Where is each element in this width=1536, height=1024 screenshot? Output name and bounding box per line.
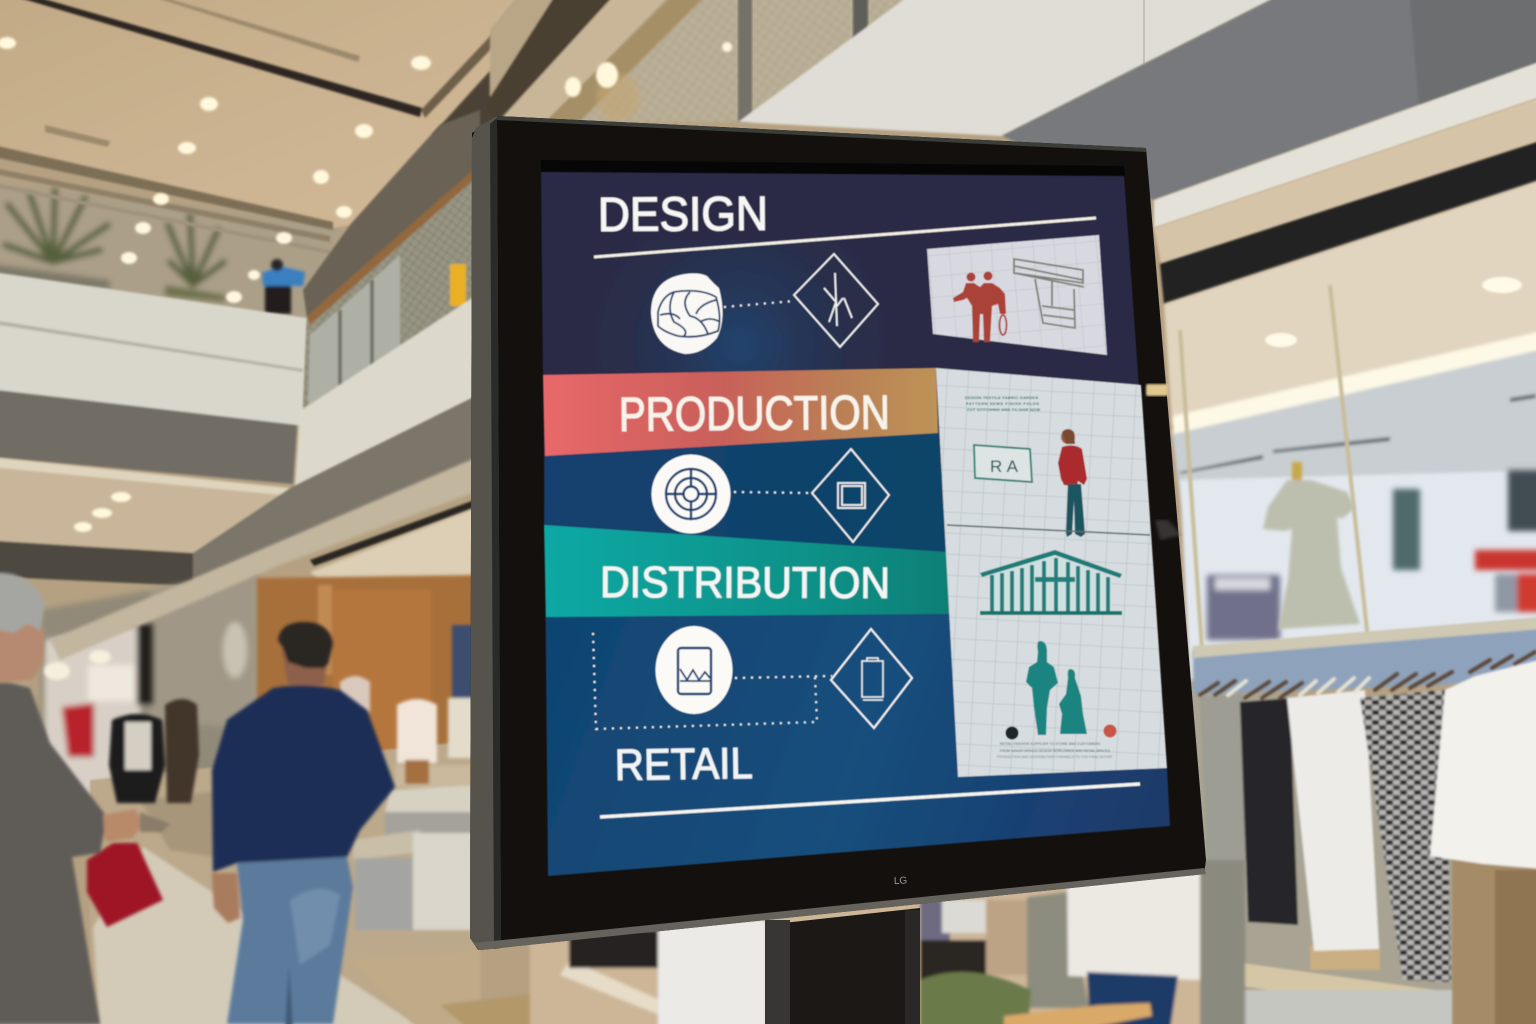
small caption: CUT STITCHING AND TO SHIP NOW (967, 407, 1040, 412)
lower ceiling (0, 394, 480, 586)
connector: production dots (734, 492, 812, 493)
dark beam right (1160, 136, 1536, 304)
left balcony fascia (0, 270, 307, 484)
figure: line structure (1014, 259, 1084, 328)
figures: teal silhouettes (1026, 641, 1087, 735)
glass and mesh railing (580, 0, 935, 122)
ceiling beams and vents (0, 0, 515, 254)
connector: retail dotted route (593, 633, 832, 729)
icon: design circle (651, 273, 723, 354)
man in navy sweater walking (212, 622, 395, 1024)
heading: DISTRIBUTION: DISTRIBUTION (600, 558, 890, 608)
ceiling (0, 0, 600, 228)
white display tables (340, 625, 480, 930)
display screen (541, 172, 1170, 876)
screen base navy (541, 172, 1170, 876)
sweater (212, 685, 395, 872)
wood store wall (257, 575, 480, 800)
figure: person in red (1058, 429, 1087, 537)
person on balcony (262, 259, 305, 314)
store hallway (40, 570, 260, 800)
production band (543, 368, 938, 456)
sign: RA: R A (990, 457, 1019, 476)
man in gray coat with red bag (0, 573, 170, 1024)
light beam diagonal (50, 456, 480, 660)
mannequin dress (1263, 462, 1360, 629)
heading: PRODUCTION: PRODUCTION (619, 387, 890, 442)
right side railing behind the monitor edge (295, 110, 480, 488)
building (980, 550, 1122, 615)
heading: DESIGN: DESIGN (598, 188, 768, 242)
monitor frame (470, 116, 1206, 950)
background under sign (530, 860, 1245, 1024)
gray coat (0, 683, 107, 1024)
icon: production target circle (652, 454, 730, 534)
hangers (1200, 652, 1535, 698)
panel: design sketch (927, 235, 1107, 355)
ground line (947, 525, 1150, 535)
clothes rail (1193, 616, 1536, 658)
reflections on bezel (1146, 384, 1182, 540)
connector: design dots (724, 301, 794, 307)
footnote text: FROM MAKER BRINGS DESIGN WORLDWIDE AND RETAIL SPACES (1000, 749, 1111, 753)
hand (103, 809, 143, 842)
jeans (227, 857, 353, 1024)
hair (278, 622, 333, 668)
icon: retail diamond (831, 629, 912, 728)
icon: production diamond (812, 449, 889, 542)
upper floor interior left (0, 180, 340, 330)
divider: bottom rule (600, 784, 1140, 817)
floor (90, 740, 480, 1024)
footnote text (997, 742, 1112, 759)
divider: design rule (594, 218, 1096, 257)
skin: face and hand (280, 640, 330, 685)
footnote text: PRODUCTION AND DISTRIBUTION CHANNELS TO THE FINAL BUYER (997, 755, 1112, 759)
gray band (0, 388, 297, 484)
brand logo: LG (894, 876, 908, 887)
footnote text: RETAIL FASHION SUPPLIER TO STORE AND CUSTOMERS (1000, 742, 1101, 746)
head (0, 625, 45, 683)
sign: RA (974, 445, 1032, 482)
distant shoppers (109, 699, 199, 803)
figure: red people (953, 272, 1006, 342)
beige soffit (1154, 92, 1536, 264)
store window (1164, 175, 1536, 680)
icon: retail circle (656, 626, 732, 714)
small caption (965, 395, 1040, 412)
clothes rack (1190, 652, 1536, 1024)
window ceiling lights (1265, 277, 1522, 347)
red bag (87, 843, 163, 927)
monitor stand (765, 908, 920, 1024)
distribution band (544, 525, 950, 617)
heading: RETAIL: RETAIL (614, 739, 753, 790)
blue band below rail (1193, 618, 1536, 695)
blue band after production (544, 433, 948, 552)
small logos (1006, 724, 1116, 740)
white balustrade upper right (738, 0, 1310, 136)
panel: illustrated grid (936, 368, 1167, 777)
icon: design diamond (794, 254, 878, 347)
white strip (1154, 56, 1536, 228)
small caption: PATTERN SEWS FINISH FOLDS (966, 401, 1039, 406)
hallway lights (44, 650, 111, 680)
stripes of the dark structure, top middle (430, 0, 722, 170)
gray panel upper right (1002, 0, 1536, 200)
store interior behind glass (1207, 470, 1536, 640)
lower blue area (546, 614, 1170, 876)
small caption: DESIGN TEXTILE FABRIC GARDEN (965, 395, 1038, 400)
ceiling lights (0, 37, 732, 532)
